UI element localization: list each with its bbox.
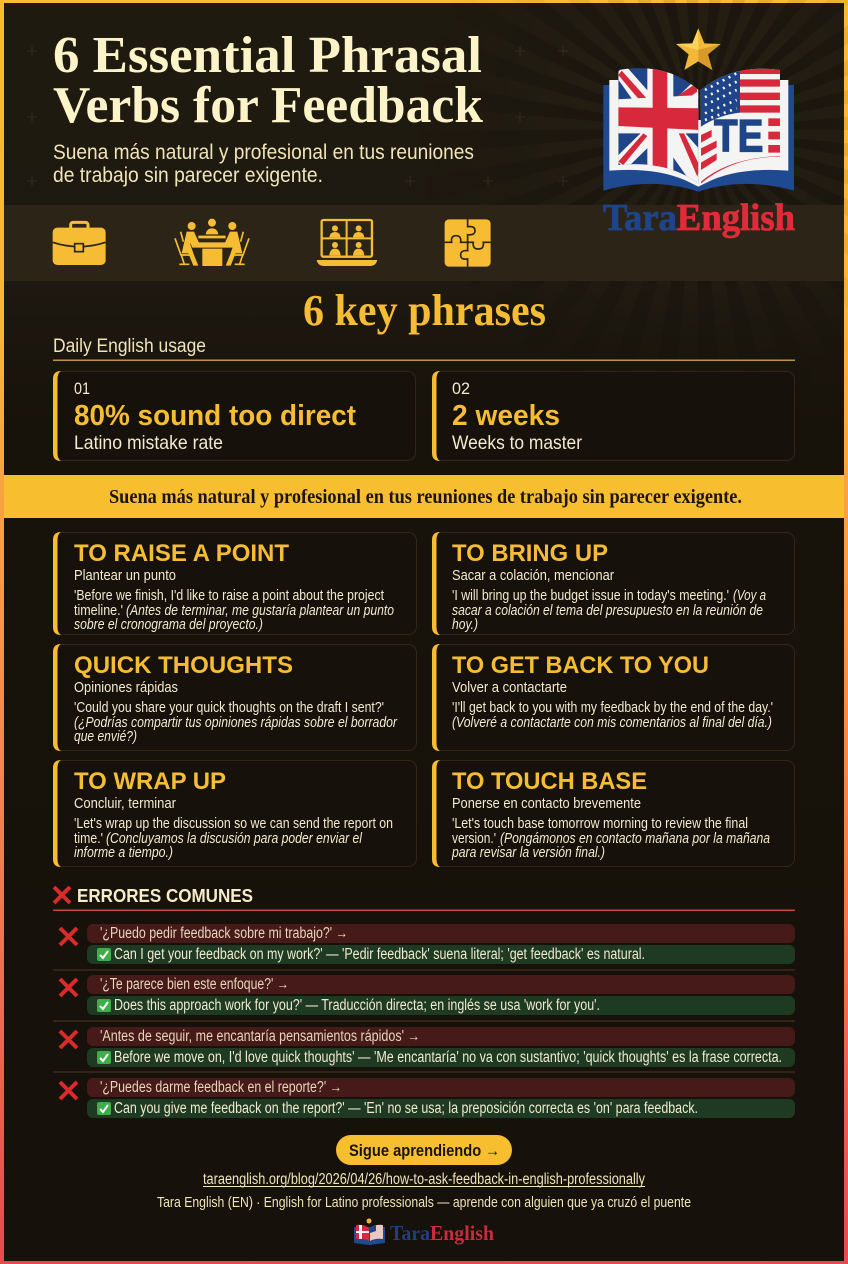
phrase card: quick thoughts: que envié?) (74, 729, 137, 745)
error row 1 (60, 924, 795, 964)
stat card 02: Weeks to master (452, 432, 582, 454)
phrase card: to get back to you: Volver a contactarte (452, 679, 567, 696)
phrase card: to raise a point: Plantear un punto (74, 567, 176, 584)
subtitle: Suena más natural y profesional en tus reuniones (53, 141, 474, 164)
icon: TE monogram: TE (714, 111, 763, 162)
phrase card: to get back to you: 'I'll get back to you with my feedback by the end of the day.' (452, 700, 773, 716)
stat card 02: 02 (452, 379, 470, 398)
yellow banner: Suena más natural y profesional en tus reuniones de trabajo sin parecer exigente. (109, 486, 742, 508)
title (53, 27, 483, 134)
phrase card: to bring up: sacar a colación el tema del presupuesto en la reunión de (452, 603, 763, 619)
title: 6 Essential Phrasal (53, 27, 482, 84)
phrase card: to touch base: Ponerse en contacto brevemente (452, 795, 641, 812)
error row 1: '¿Puedo pedir feedback sobre mi trabajo?' → (100, 925, 348, 942)
logo wordmark: TaraEnglish (603, 197, 795, 239)
errors heading: ERRORES COMUNES (77, 886, 253, 906)
phrase card: to wrap up: time.' (74, 831, 103, 847)
subtitle: de trabajo sin parecer exigente. (53, 164, 323, 187)
error row 1: Can I get your feedback on my work?' — 'Pedir feedback' suena literal; 'get feedback' es natural. (114, 946, 645, 963)
phrase card: to raise a point (53, 532, 416, 635)
phrase card: quick thoughts: 'Could you share your quick thoughts on the draft I sent?' (74, 700, 384, 716)
phrase card: to wrap up: 'Let's wrap up the discussion so we can send the report on (74, 816, 393, 832)
error row 2 (60, 975, 795, 1015)
phrase card: to bring up: TO BRING UP (452, 540, 608, 567)
phrase card: to get back to you: (Volveré a contactarte con mis comentarios al final del día.) (452, 715, 772, 731)
phrase card: to wrap up: TO WRAP UP (74, 768, 226, 795)
stat card 02 (432, 371, 794, 461)
icon: video call laptop (317, 220, 377, 266)
stat card 01: 01 (74, 379, 90, 398)
icon: briefcase (53, 222, 106, 265)
error row 2: '¿Te parece bien este enfoque?' → (100, 976, 289, 993)
footer tagline: Tara English (EN) · English for Latino professionals — aprende con alguien que ya cruzó el puente (157, 1194, 691, 1211)
error row 4: '¿Puedes darme feedback en el reporte?' → (100, 1079, 342, 1096)
call to action button (336, 1135, 512, 1165)
phrase card: to get back to you (432, 644, 794, 751)
section label: Daily English usage (53, 336, 206, 357)
footer logo (354, 1218, 494, 1245)
stat card 01 (53, 371, 416, 461)
logo: TaraEnglish book (603, 28, 795, 239)
errors heading (53, 886, 795, 911)
phrase card: to bring up (432, 532, 794, 635)
phrase card: to bring up: Sacar a colación, mencionar (452, 567, 614, 584)
call to action button: Sigue aprendiendo → (349, 1141, 500, 1160)
link url: taraenglish.org/blog/2026/04/26/how-to-ask-feedback-in-english-professionally (203, 1171, 645, 1188)
phrase card: quick thoughts: Opiniones rápidas (74, 679, 178, 696)
phrase card: to wrap up: informe a tiempo.) (74, 845, 173, 861)
phrase card: quick thoughts (53, 644, 416, 751)
phrase card: to raise a point: 'Before we finish, I'd like to raise a point about the project (74, 588, 384, 604)
icon band (4, 205, 844, 281)
phrase card: to get back to you: TO GET BACK TO YOU (452, 652, 709, 679)
phrase card: to bring up: hoy.) (452, 617, 478, 633)
phrase card: to raise a point: (Antes de terminar, me gustaría plantear un punto (126, 603, 394, 619)
phrase card: to bring up: 'I will bring up the budget issue in today's meeting.' (452, 588, 729, 604)
icon: UK flag page (618, 68, 698, 184)
icon: puzzle (445, 219, 491, 267)
phrase card: to touch base: para revisar la versión final.) (451, 845, 605, 861)
subtitle (53, 141, 474, 187)
footer logo: TaraEnglish (390, 1221, 494, 1245)
icon: book pages (609, 80, 788, 187)
stat card 01: Latino mistake rate (74, 432, 223, 454)
phrase card: quick thoughts: (¿Podrías compartir tus opiniones rápidas sobre el borrador (74, 715, 398, 731)
phrase card: to touch base: (Pongámonos en contacto mañana por la mañana (500, 831, 770, 847)
phrase card: to raise a point: sobre el cronograma del proyecto.) (74, 617, 263, 633)
stat card 01: 80% sound too direct (74, 400, 356, 432)
error row 3: 'Antes de seguir, me encantaría pensamientos rápidos' → (100, 1028, 420, 1045)
title: Verbs for Feedback (53, 77, 483, 134)
icon: book cover (603, 85, 794, 192)
phrase card: to touch base: version.' (452, 831, 496, 847)
icon: meeting table (175, 219, 249, 266)
phrase card: to wrap up: (Concluyamos la discusión para poder enviar el (106, 831, 363, 847)
error row 3 (60, 1027, 795, 1067)
phrase card: to touch base (432, 760, 794, 867)
phrase card: to raise a point: timeline.' (74, 603, 123, 619)
icon: gold star (676, 28, 721, 70)
phrase card: to touch base: 'Let's touch base tomorrow morning to review the final (452, 816, 748, 832)
phrase card: to bring up: (Voy a (733, 588, 766, 604)
error row 4: Can you give me feedback on the report?' — 'En' no se usa; la preposición correcta es 'on' para feedback. (114, 1100, 698, 1117)
phrase card: to wrap up: Concluir, terminar (74, 795, 176, 812)
stat card 02: 2 weeks (452, 400, 560, 432)
phrase card: to raise a point: TO RAISE A POINT (74, 540, 289, 567)
yellow banner (4, 475, 844, 518)
error row 2: Does this approach work for you?' — Traducción directa; en inglés se usa 'work for you'. (114, 997, 600, 1014)
heading: 6 key phrases: 6 key phrases (303, 286, 546, 335)
phrase card: to touch base: TO TOUCH BASE (452, 768, 647, 795)
phrase card: to wrap up (53, 760, 416, 867)
phrase card: quick thoughts: QUICK THOUGHTS (74, 652, 293, 679)
icon: US flag page (700, 68, 780, 184)
error row 4 (60, 1078, 795, 1118)
